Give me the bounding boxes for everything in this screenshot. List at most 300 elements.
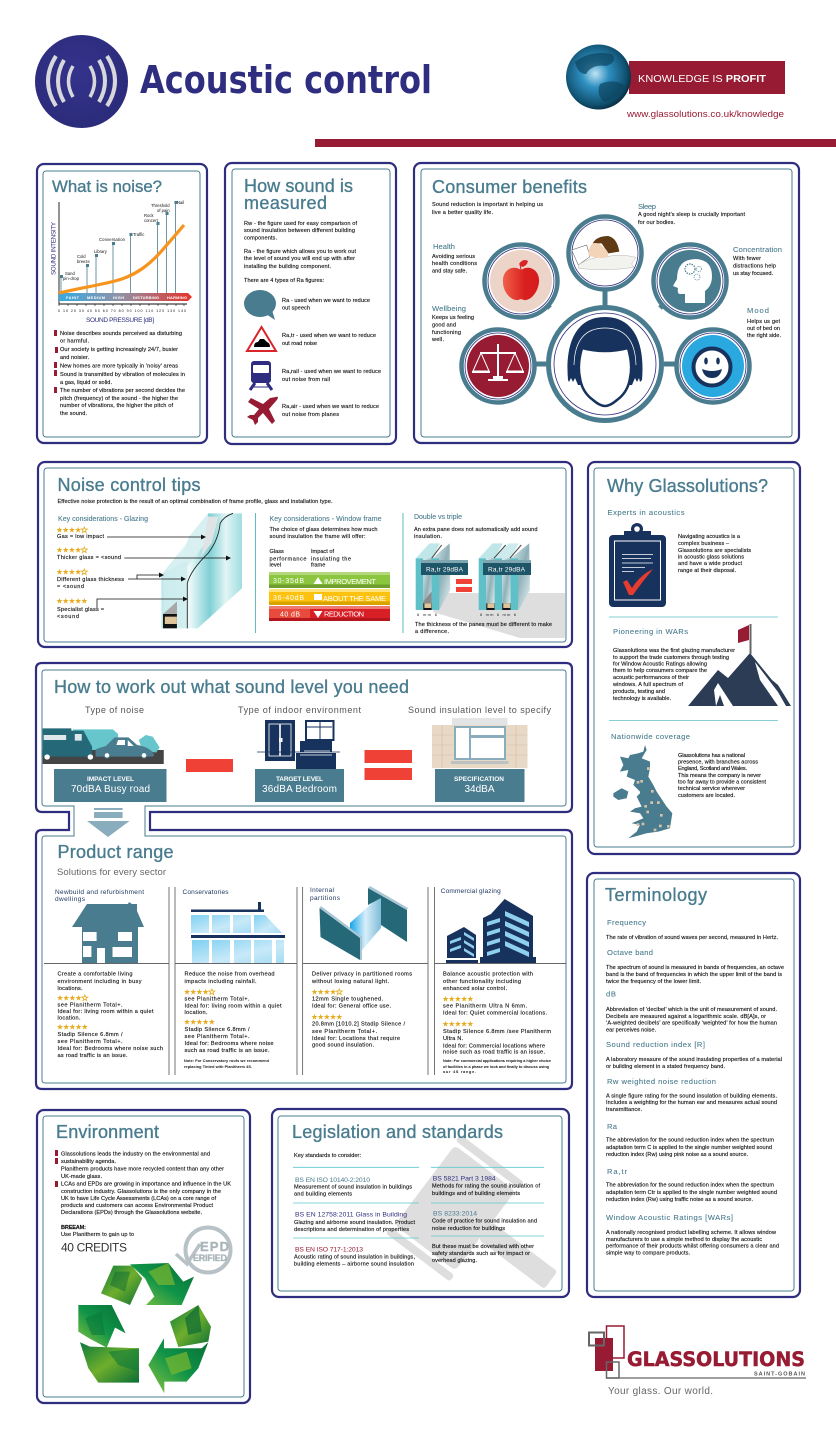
icon: plane [247, 397, 278, 425]
minus sign [186, 759, 233, 772]
term: WARs: manufacturers to use a simple method to display the acoustic [606, 1237, 762, 1243]
column: newbuild dwellings: see Planitherm Total+. [58, 1039, 123, 1045]
column: newbuild dwellings: locations. [58, 986, 83, 992]
rating bar: about the same: 36-40dB [273, 595, 304, 602]
panel: terminology [587, 873, 800, 1297]
column: commercial glazing: Ideal for: Quiet commercial locations. [443, 1010, 547, 1016]
pioneering text: Glassolutions was the first glazing manufacturer [613, 648, 735, 654]
chart: sound intensity vs pressure: pin-drop [63, 276, 80, 281]
icon: mountain with flag [688, 624, 791, 706]
definitions text [244, 221, 357, 284]
Ra,air text [282, 404, 379, 418]
column: newbuild dwellings: Stadip Silence 6.8mm / [58, 1032, 123, 1038]
logo: glassolutions: Your glass. Our world. [608, 1386, 713, 1397]
panels: how to work out sound level and product range outline [36, 663, 572, 1089]
column: internal partitions: Deliver privacy in partitioned rooms [312, 972, 412, 978]
label: wellbeing [431, 304, 474, 343]
experts text: Glassolutions are specialists [678, 548, 751, 554]
BREEAM credits: 40 CREDITS [61, 1241, 127, 1255]
term: dB: Decibels are measured against a logarithmic scale. dB[A]s, or [606, 1014, 766, 1020]
BREEAM credits: Use Planitherm to gain up to [61, 1232, 134, 1238]
stars and label: different thickness: Different glass thickness [57, 577, 124, 583]
column: conservatories: Ideal for: Bedrooms where noise [184, 1041, 274, 1047]
bullet list: or harmful. [60, 338, 89, 344]
rating bar: improvement [269, 572, 390, 588]
term: WARs [606, 1213, 779, 1256]
term: dB: ear perceives noise. [606, 1028, 656, 1034]
standard: BS EN ISO 10140: and building elements [294, 1192, 352, 1198]
header rule [315, 139, 836, 147]
chart: sound intensity vs pressure: Sand [65, 271, 75, 276]
Ra,rail text: out noise from rail [282, 377, 330, 383]
dividers [609, 617, 778, 720]
column: internal partitions: 20.8mm [1010.2] Stadip Silence / [312, 1022, 405, 1028]
intro text: Sound reduction is important in helping us [432, 202, 543, 208]
label: wellbeing: Wellbeing [432, 304, 466, 313]
arrow: down to product range [87, 808, 130, 837]
column: newbuild dwellings: Newbuild and refurbishment [55, 889, 144, 896]
box: specification: 34dBA [464, 784, 495, 795]
heading: Terminology [605, 885, 707, 905]
icon: house [72, 902, 144, 963]
experts text [678, 534, 751, 574]
rating label: triple: Ra,tr 29dBA [488, 566, 526, 574]
chart: sound intensity vs pressure: 0 10 20 30 40 50 60 70 80 90 100 110 120 130 140 [58, 309, 186, 313]
column: internal partitions: without losing natural light. [311, 979, 389, 985]
window frame considerations: level [270, 562, 281, 568]
stars and label: specialist glass: <sound [57, 614, 79, 620]
definitions text: components. [244, 236, 277, 242]
icon: clipboard [609, 523, 666, 607]
term: Ra: adaptation term C is applied to the single number weighted sound [606, 1145, 772, 1151]
term: octave band: Octave band [607, 948, 653, 957]
double vs triple: a difference. [415, 629, 449, 635]
dividers [293, 1167, 544, 1238]
closing note: But these must be dovetailed with other [432, 1244, 534, 1250]
label: mood: Mood [747, 306, 769, 315]
coverage text: This means the company is never [678, 773, 761, 779]
bullet text: sustainability agenda. [61, 1159, 116, 1165]
column: internal partitions: 12mm Single toughened. [312, 997, 383, 1003]
column: conservatories: replacing Tinted with Planitherm 4S. [184, 1065, 252, 1069]
column: internal partitions: Internal [310, 887, 335, 894]
column: commercial glazing: other functionality including [443, 979, 521, 985]
bullet list: New homes are more typically in ‘noisy’ areas [60, 364, 178, 370]
stars and label: different thickness: = <sound [57, 584, 84, 590]
panel: how sound is measured [225, 163, 396, 444]
term: WARs: simple way to compare products. [606, 1250, 690, 1256]
column captions: Sound insulation level to specify [408, 705, 552, 715]
coverage text: customers are located. [678, 793, 735, 799]
standard: BS 8233: BS 8233:2014 [433, 1211, 477, 1218]
heading: What is noise? [52, 177, 162, 196]
bullet text: Planitherm products have more recycled content than any other [61, 1167, 224, 1173]
bullet text: Glassolutions leads the industry on the environmental and [61, 1152, 210, 1158]
term: Rw: Rw weighted noise reduction [607, 1077, 716, 1086]
double vs triple [414, 514, 565, 638]
label: concentration: With fewer [733, 256, 761, 262]
double vs triple: Double vs triple [414, 514, 462, 521]
pane dimensions [417, 612, 517, 617]
standard: BS EN ISO 10140: BS EN ISO 10140-2:2010 [295, 1177, 370, 1184]
heading: how to work out: How to work out what sound level you need [54, 677, 409, 697]
column: commercial glazing: Balance acoustic protection with [443, 972, 533, 978]
column captions: Type of noise [85, 705, 144, 715]
column: newbuild dwellings: Ideal for: Bedrooms where noise such [58, 1046, 163, 1052]
term: octave band: twice the frequency of the lower limit. [606, 979, 701, 985]
double vs triple: The thickness of the panes must be different to make [415, 622, 552, 628]
column: conservatories: see Planitherm Total+. [184, 997, 250, 1003]
pioneering text [612, 648, 735, 702]
rating label: double: Ra,tr 29dBA [426, 566, 464, 574]
term: dB: dB [606, 990, 616, 999]
definitions text: Rw - the figure used for easy comparison of [244, 221, 357, 227]
term: sound reduction index: Sound reduction index [R] [606, 1040, 705, 1049]
banner: knowledge is profit [629, 61, 785, 94]
label: concentration: us stay focused. [733, 271, 773, 277]
intro text [432, 202, 543, 216]
standard: BS EN 12758: descriptions and determination of properties [294, 1227, 409, 1233]
bullet list: Noise describes sounds perceived as disturbing [60, 331, 182, 337]
window frame considerations: Glass [270, 549, 284, 555]
Ra,tr text [282, 333, 376, 347]
standard: BS 5821: buildings and of building elements [432, 1191, 520, 1197]
connectors [530, 290, 680, 364]
label: mood: Helps us get [747, 319, 780, 325]
coverage text: presence, with branches across [678, 760, 758, 766]
stars and label: specialist glass [56, 598, 104, 620]
arrows [97, 534, 231, 608]
title: Acoustic control [140, 58, 432, 102]
heading: measured [244, 193, 327, 213]
rating bar: improvement: 30-35dB [273, 578, 304, 585]
bullet list: Sound is transmitted by vibration of molecules in [60, 372, 185, 378]
column: conservatories: location. [184, 1010, 208, 1016]
label: mood: the right side. [747, 333, 781, 339]
column: commercial glazing: enhanced solar control. [443, 986, 507, 992]
column: conservatories: Note: For Conservatory roofs we recommend [184, 1059, 270, 1063]
definitions text: Ra - the figure which allows you to work out [244, 249, 356, 255]
standard: BS 5821: BS 5821 Part 3 1984 [433, 1176, 496, 1183]
column: commercial glazing [441, 888, 551, 1074]
window frame considerations: Impact of [311, 549, 334, 555]
chart: sound intensity vs pressure: Traffic [133, 232, 144, 237]
column: internal partitions: Ideal for: Locations that require [312, 1036, 400, 1042]
column: commercial glazing: noise such as road traffic is an issue. [443, 1050, 545, 1056]
bullet list: a gas, liquid or solid. [60, 380, 112, 386]
term: frequency [606, 918, 778, 941]
rating bar: reduction: 40 dB [280, 612, 300, 618]
column: newbuild dwellings: see Planitherm Total+. [58, 1003, 123, 1009]
term: WARs: Window Acoustic Ratings [WARs] [606, 1213, 733, 1222]
box: impact level: 70dBA Busy road [71, 784, 150, 795]
chart: sound intensity vs pressure: Cold [77, 254, 86, 259]
panel: why glassolutions [588, 462, 800, 854]
coverage heading: Nationwide coverage [611, 732, 690, 741]
Ra,tr text: Ra,tr - used when we want to reduce [282, 333, 376, 339]
stars and label: thicker glass [56, 547, 121, 561]
label: wellbeing: Keeps us feeling [432, 315, 474, 321]
pane dimensions: 6 mm 6 [417, 612, 438, 617]
label: health: health conditions [432, 261, 477, 267]
standard: BS 8233: Code of practice for sound insulation and [432, 1219, 537, 1225]
bullet text: products and customers can access Environmental Product [61, 1203, 213, 1209]
stars and label: gas [56, 527, 104, 540]
heading: Why Glassolutions? [607, 476, 768, 496]
bullet text: Declarations (EPDs) through the Glassolutions website. [61, 1210, 202, 1216]
term: dB [606, 990, 777, 1034]
double vs triple: An extra pane does not automatically add sound [414, 527, 538, 533]
glazing considerations [56, 516, 231, 620]
circle: mood smiley [676, 330, 750, 402]
standard: BS EN ISO 717: BS EN ISO 717-1:2013 [295, 1247, 363, 1254]
heading: product range: Product range [58, 842, 174, 862]
glazing considerations: Key considerations - Glazing [58, 516, 148, 523]
window frame considerations: sound insulation the frame will offer: [270, 534, 366, 540]
icon: conservatory [191, 902, 285, 963]
standard: BS EN ISO 10140: Measurement of sound insulation in buildings [294, 1184, 412, 1190]
experts text: range at their disposal. [678, 568, 736, 574]
bullet list: and noisier. [60, 355, 89, 361]
label: concentration [733, 245, 782, 277]
label: sleep: Sleep [638, 202, 656, 211]
experts text: complex business – [678, 541, 730, 547]
circle: health apple [484, 244, 558, 318]
term: frequency: The rate of vibration of sound waves per second, measured in Hertz. [606, 935, 778, 941]
box: specification [435, 769, 524, 802]
column: conservatories: Ideal for: living room within a quiet [184, 1004, 282, 1010]
term: dB: ‘A-weighted decibels’ are specifically ‘weighted’ for how the human [606, 1020, 777, 1026]
label: wellbeing: good and [432, 322, 456, 328]
heading: Noise control tips [58, 475, 200, 495]
pioneering text: to support the trade customers through testing [613, 655, 729, 661]
logo: glassolutions: GLASSOLUTIONS [627, 1348, 805, 1371]
intro text: Effective noise protection is the result of an optimal combination of frame profile, glass and installation type. [58, 499, 333, 505]
column: commercial glazing: Ideal for: Commercial locations where [443, 1044, 545, 1050]
standard: BS EN ISO 717: building elements – airborne sound insulation [294, 1262, 414, 1268]
panel: consumer benefits [414, 163, 799, 443]
term: Ra,tr: Ra,tr [607, 1167, 627, 1176]
heading [244, 176, 353, 213]
term: sound reduction index [606, 1040, 782, 1070]
icon: globe [566, 44, 631, 110]
standard: BS EN ISO 717 [294, 1247, 415, 1268]
term: octave band: The spectrum of sound is measured in bands of frequencies, an octave [606, 965, 784, 971]
chart: sound intensity vs pressure: Library [94, 249, 108, 254]
column: newbuild dwellings: Ideal for: living room within a quiet [58, 1009, 154, 1015]
chart: sound intensity vs pressure [50, 200, 192, 324]
bullet text: UK-made glass. [61, 1174, 102, 1180]
closing note: overhead glazing. [432, 1258, 477, 1264]
term: octave band [606, 948, 784, 985]
column captions [85, 705, 552, 715]
icon: EPD verified badge [176, 1228, 230, 1272]
standard: BS 5821: Methods for rating the sound insulation of [432, 1184, 540, 1190]
rating bar: reduction: REDUCTION [324, 610, 364, 618]
term: Rw [606, 1077, 777, 1113]
column: conservatories: Conservatories [182, 889, 229, 896]
logo: glassolutions: SAINT-GOBAIN [754, 1372, 805, 1378]
column: internal partitions [310, 886, 412, 1048]
triple glazing illustration [479, 543, 530, 610]
coverage text: technical service wherever [678, 786, 745, 792]
intro text: Key standards to consider: [294, 1153, 361, 1159]
Ra text [282, 298, 370, 312]
definitions text: installing the building component. [244, 264, 331, 270]
rating bar: improvement: IMPROVEMENT [324, 577, 376, 586]
heading: How sound is [244, 176, 353, 196]
BREEAM credits [61, 1225, 134, 1255]
column: newbuild dwellings: location. [58, 1016, 81, 1022]
rating bar: about the same [269, 589, 390, 605]
label: sleep: A good night’s sleep is crucially important [638, 212, 745, 218]
glazing illustration [161, 513, 242, 628]
header [35, 35, 785, 128]
label: health: Avoiding serious [432, 254, 475, 260]
double vs triple: insulation. [414, 534, 442, 540]
label: health: Health [433, 242, 455, 251]
icon: glass partition [320, 886, 408, 960]
chart: sound intensity vs pressure: DISTURBING [133, 295, 159, 300]
icon: office buildings [446, 899, 536, 963]
double glazing illustration [416, 543, 450, 610]
rating label: double [421, 560, 468, 575]
standard: BS 8233: noise reduction for buildings [432, 1226, 505, 1232]
label: health: and stay safe. [432, 268, 467, 274]
chart: sound intensity vs pressure: of pain [157, 208, 170, 213]
circle: head with headphones [548, 308, 662, 420]
term: Rw: A single figure rating for the sound insulation of building elements. [606, 1094, 777, 1100]
definitions text: There are 4 types of Ra figures: [244, 278, 324, 284]
intro text: live a better quality life. [432, 210, 493, 216]
window frame considerations: frame [311, 562, 325, 568]
pioneering text: them to help consumers compare the [613, 668, 707, 674]
chart: sound intensity vs pressure: Rock [144, 213, 154, 218]
rating bar: about the same: ABOUT THE SAME [323, 594, 386, 603]
standard: BS EN 12758 [294, 1212, 415, 1233]
pioneering text: acoustic performances of their [613, 675, 689, 681]
stars and label: gas: Gas = low impact [57, 534, 104, 540]
chart: sound intensity vs pressure: breeze [77, 259, 90, 264]
panel: environment [37, 1110, 250, 1403]
column captions: Type of indoor environment [238, 705, 361, 715]
column: newbuild dwellings: Create a comfortable living [58, 972, 132, 978]
label: sleep: for our bodies. [638, 220, 675, 226]
experts text: Navigating acoustics is a [678, 534, 741, 540]
label: sleep [638, 202, 745, 226]
window frame considerations: insulating the [311, 556, 351, 562]
rating bar: reduction [269, 606, 390, 621]
icon: road warning triangle [247, 327, 276, 351]
equals sign [456, 579, 472, 592]
standard: BS 8233 [432, 1211, 537, 1232]
column: conservatories: impacts including rainfall. [184, 979, 257, 985]
label: mood: out of bed on [747, 326, 780, 332]
term: Rw: Includes a weighting for the human ear and measures actual sound [606, 1100, 777, 1106]
Ra text: Ra - used when we want to reduce [282, 298, 370, 304]
circle: wellbeing scales [462, 330, 534, 402]
circle: sleep [568, 216, 642, 290]
column: conservatories: see Planitherm Total+. [184, 1034, 250, 1040]
bullet list: number of vibrations, the higher the pitch of [60, 403, 173, 409]
circle: concentration head [654, 244, 726, 318]
panel: legislation and standards [272, 1109, 588, 1330]
Ra,rail text: Ra,rail - used when we want to reduce [282, 369, 381, 375]
subheading: Solutions for every sector [57, 867, 166, 878]
term: sound reduction index: or building element in a stated frequency band. [606, 1064, 725, 1070]
icon: EPD verified badge: EPD [200, 1239, 229, 1254]
column: commercial glazing: of facilities in a phase we look and finally to discuss using [443, 1065, 550, 1069]
heading: Consumer benefits [432, 177, 587, 197]
column: newbuild dwellings [55, 889, 163, 1059]
term: WARs: performance of their products whilst offering consumers a clear and [606, 1244, 779, 1250]
box: target level: 36dBA Bedroom [262, 784, 337, 795]
background gavel [386, 1134, 588, 1330]
standard: BS EN 12758: Glazing and airborne sound insulation. Product [294, 1220, 415, 1226]
Ra,rail text [282, 369, 381, 383]
closing note [432, 1244, 534, 1264]
bullet text [55, 1150, 231, 1216]
illustration: bedroom furniture [257, 720, 340, 769]
term: Ra,tr: The abbreviation for the sound reduction index when the spectrum [606, 1183, 774, 1189]
icon: train [250, 361, 272, 390]
bullet list: pitch (frequency) of the sound - the higher the [60, 396, 178, 402]
label: concentration: distractions help [733, 264, 776, 270]
Ra text: out speech [282, 306, 310, 312]
equals sign [364, 750, 412, 780]
column: commercial glazing: our 4S range. [443, 1070, 476, 1074]
BREEAM credits: BREEAM: [61, 1225, 86, 1231]
term: Ra,tr [606, 1167, 777, 1203]
term: Ra: reduction index (Rw) using pink noise as a sound source. [606, 1152, 748, 1158]
coverage text: too far away to provide a consistent [678, 780, 766, 786]
column: internal partitions: Ideal for: General office use. [312, 1004, 391, 1010]
pane dimensions: 6 mm 6 mm 6 [480, 612, 517, 617]
chart: sound intensity vs pressure: concert [144, 218, 159, 223]
label: mood [747, 306, 781, 339]
label: health [432, 242, 477, 274]
icon: speech bubble [244, 290, 276, 320]
chart: sound intensity vs pressure: MEDIUM [87, 295, 105, 300]
Ra,air text: Ra,air - used when we want to reduce [282, 404, 379, 410]
bullet list [54, 330, 185, 417]
pioneering text: windows. A full spectrum of [612, 682, 683, 688]
column: conservatories: Stadip Silence 6.8mm / [184, 1027, 250, 1033]
column: internal partitions: good sound insulation. [312, 1042, 374, 1048]
term: frequency: Frequency [607, 918, 646, 927]
column: newbuild dwellings: dwellings [55, 896, 86, 903]
bullet list: Our society is getting increasingly 24/7, busier [60, 347, 178, 353]
standard: BS EN ISO 10140 [294, 1177, 412, 1198]
column: internal partitions: see Planitherm Total+. [312, 1029, 377, 1035]
column dividers [256, 513, 403, 633]
box: specification: SPECIFICATION [454, 776, 504, 783]
Ra,air text: out noise from planes [282, 412, 339, 418]
map: UK coverage [613, 745, 672, 838]
term: Ra [606, 1122, 774, 1158]
heading: Legislation and standards [292, 1122, 503, 1142]
label: concentration: Concentration [733, 245, 782, 254]
chart: sound intensity vs pressure: Conversation [99, 237, 126, 242]
window frame considerations: performance [270, 556, 306, 562]
definitions text: sound insulation between different building [244, 228, 355, 234]
pioneering text: technology is available. [613, 696, 671, 702]
standard: BS EN 12758: BS EN 12758:2011 Glass in Building [295, 1212, 407, 1219]
stars and label: thicker glass: Thicker glass = <sound [57, 555, 121, 561]
column: newbuild dwellings: as road traffic is an issue. [58, 1053, 128, 1059]
term: octave band: band is the band of frequencies in which the upper limit of the band is [606, 972, 782, 978]
column: conservatories: Reduce the noise from overhead [184, 972, 274, 978]
